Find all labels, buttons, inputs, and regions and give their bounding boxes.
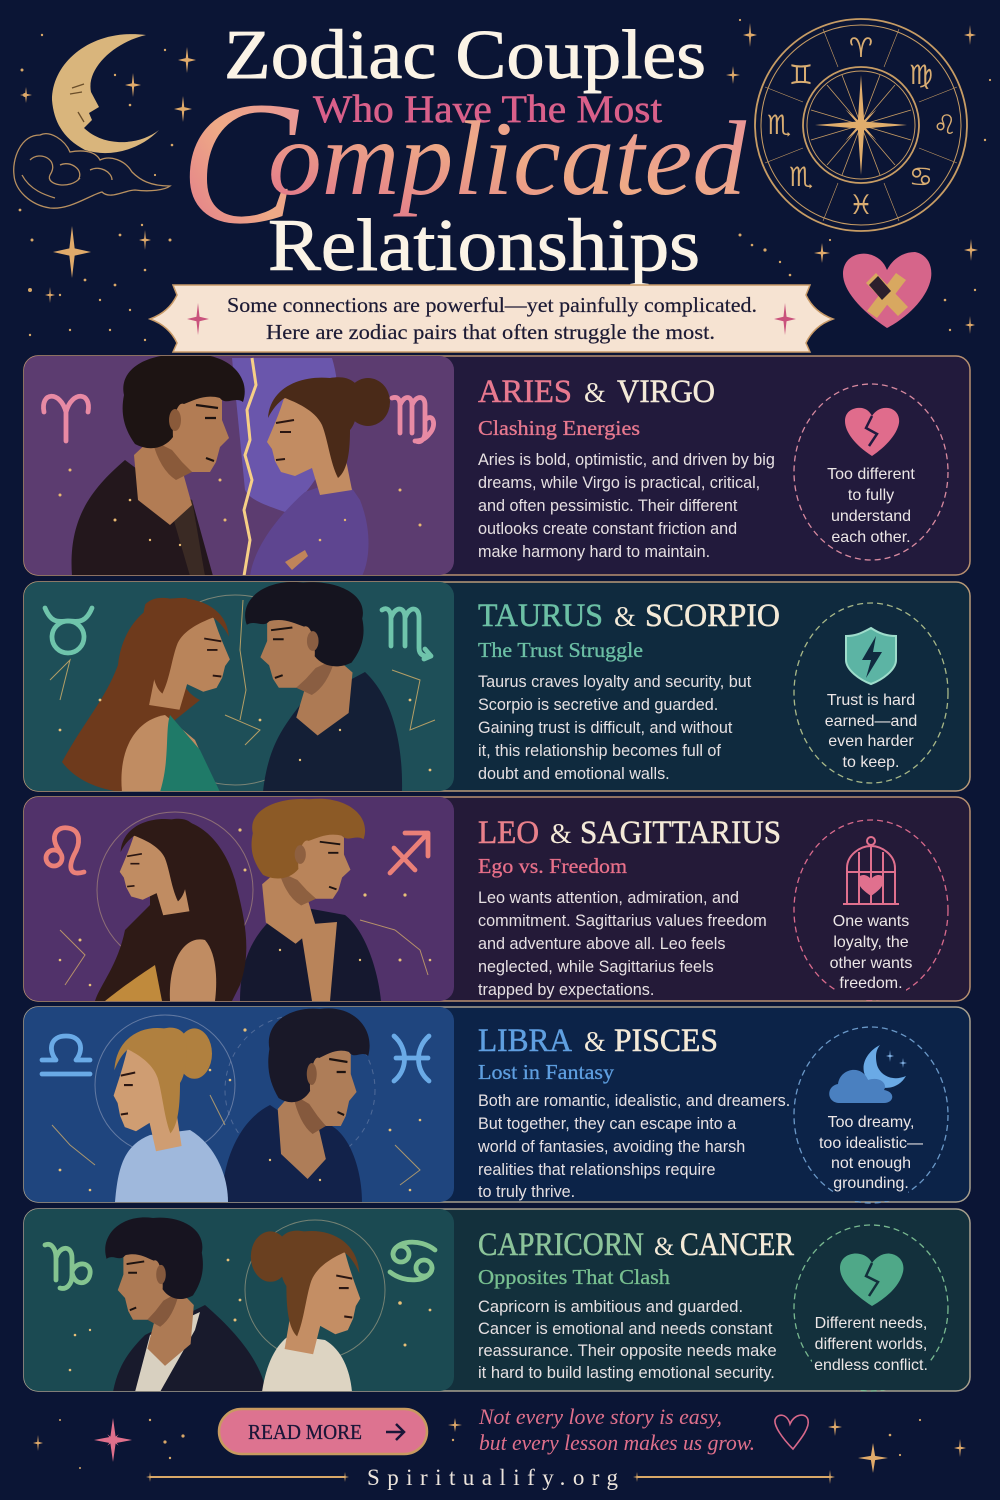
icon: Capricorn glyph (45, 1244, 90, 1288)
heading: Aries & Virgo: ARIES (478, 374, 572, 410)
icon: Pisces glyph (394, 1036, 429, 1081)
description: it, this relationship becomes full of (478, 742, 721, 760)
stars top right (726, 23, 978, 334)
icon: Libra glyph (42, 1036, 90, 1074)
description: outlooks create constant friction and (478, 520, 737, 538)
website: Spiritualify.org (367, 1465, 618, 1490)
heading: Aries & Virgo: VIRGO (617, 374, 715, 410)
subtitle: Opposites That Clash (478, 1265, 671, 1289)
callout text: different worlds, (815, 1336, 927, 1353)
heading: Leo & Sagittarius: & (550, 819, 572, 850)
callout text: each other. (831, 529, 911, 546)
callout text: to fully (848, 487, 894, 504)
description: reassurance. Their opposite needs make (478, 1342, 777, 1360)
title script: Complicated: C (180, 66, 300, 261)
description: world of fantasies, avoiding the harsh (477, 1138, 745, 1156)
icon: broken heart (845, 408, 899, 456)
callout text: grounding. (833, 1175, 909, 1192)
title script: Complicated: omplicated (268, 100, 747, 217)
zodiac wheel: ♏︎ (789, 162, 813, 193)
illustration: Aries and Virgo couple (24, 354, 454, 576)
callout text: other wants (830, 955, 912, 972)
heading: Capricorn & Cancer: & (654, 1232, 674, 1261)
description: make harmony hard to maintain. (478, 543, 710, 561)
heading: Libra & Pisces (478, 1023, 718, 1059)
description: Taurus craves loyalty and security, but (478, 673, 752, 691)
description: Capricorn is ambitious and guarded. (478, 1298, 743, 1316)
description: doubt and emotional walls. (478, 765, 670, 783)
illustration: Capricorn and Cancer couple (24, 1209, 454, 1392)
heading: Aries & Virgo: & (584, 378, 606, 409)
icon: Aries glyph (43, 396, 89, 441)
callout text: even harder (828, 733, 914, 750)
icon: Taurus glyph (45, 608, 92, 653)
icon: Virgo glyph (392, 397, 434, 442)
callout text: One wants (833, 913, 909, 930)
subtitle: The Trust Struggle (478, 638, 643, 662)
zodiac wheel: ♍︎ (909, 60, 933, 91)
callout: too dreamy (794, 1027, 948, 1203)
description (477, 1092, 790, 1201)
callout text (830, 913, 912, 992)
description: and often pessimistic. Their different (478, 497, 738, 515)
heading: Taurus & Scorpio: SCORPIO (645, 598, 780, 634)
heading: Libra & Pisces: & (584, 1027, 606, 1058)
callout text: Different needs, (815, 1315, 927, 1332)
icon: Scorpio glyph (382, 609, 431, 659)
icon: arrow (386, 1424, 404, 1440)
tagline (478, 1404, 755, 1455)
footer stars (33, 1418, 966, 1473)
heading: Libra & Pisces: LIBRA (478, 1023, 572, 1059)
heading: Leo & Sagittarius (478, 815, 781, 851)
subtitle: Ego vs. Freedom (478, 854, 627, 878)
callout: too different (794, 384, 948, 560)
subtitle: Clashing Energies (478, 416, 640, 440)
description: Gaining trust is difficult, and without (478, 719, 733, 737)
callout text (814, 1315, 928, 1374)
description: trapped by expectations. (478, 981, 654, 999)
subtitle: Lost in Fantasy (478, 1060, 615, 1084)
icon: moon and cloud (829, 1045, 907, 1103)
illustration: Libra and Pisces couple (24, 1007, 454, 1202)
illustration: Taurus and Scorpio couple (24, 582, 454, 792)
zodiac wheel: ♌︎ (933, 110, 957, 141)
title line: Relationships: Relationships (268, 205, 700, 287)
icon: Cancer glyph (390, 1242, 435, 1280)
callout text: freedom. (839, 975, 903, 992)
description: Both are romantic, idealistic, and dreamers. (478, 1092, 790, 1110)
panel: Libra & Pisces (24, 1007, 970, 1203)
heading: Capricorn & Cancer: CAPRICORN (478, 1227, 644, 1263)
callout text (827, 466, 915, 546)
callout text (825, 692, 917, 771)
title line: Zodiac Couples: Zodiac Couples (224, 17, 706, 94)
description: neglected, while Sagittarius feels (478, 958, 714, 976)
callout text: Too dreamy, (828, 1114, 914, 1131)
description: to truly thrive. (478, 1183, 575, 1201)
stars top left (20, 47, 196, 303)
zodiac wheel: ♈︎ (849, 33, 873, 64)
panel: Leo & Sagittarius (24, 797, 970, 1001)
description: Cancer is emotional and needs constant (478, 1320, 773, 1338)
heading: Leo & Sagittarius: SAGITTARIUS (580, 815, 781, 851)
description: realities that relationships require (478, 1161, 716, 1179)
heading: Capricorn & Cancer (478, 1227, 794, 1263)
heading: Taurus & Scorpio: TAURUS (478, 598, 603, 634)
icon: cracked shield (846, 628, 896, 684)
panel: Capricorn & Cancer (24, 1209, 970, 1392)
panel: Aries & Virgo (24, 354, 970, 576)
description (478, 673, 752, 783)
heading: Leo & Sagittarius: LEO (478, 815, 539, 851)
description: it hard to build lasting emotional security. (478, 1364, 775, 1382)
description: Leo wants attention, admiration, and (478, 889, 739, 907)
zodiac wheel: ♊︎ (789, 60, 813, 91)
icon: crescent moon (52, 34, 159, 153)
button: read more: READ MORE (248, 1420, 362, 1444)
description: Aries is bold, optimistic, and driven by big (478, 451, 775, 469)
description (478, 451, 775, 561)
zodiac wheel: ♋︎ (909, 162, 933, 193)
callout text: loyalty, the (833, 934, 909, 951)
title line: Who Have The Most: Who Have The Most (313, 88, 662, 131)
description: commitment. Sagittarius values freedom (478, 912, 767, 930)
icon: bandaged heart (843, 252, 931, 328)
icon: birdcage with heart (843, 837, 899, 904)
description: But together, they can escape into a (478, 1115, 736, 1133)
illustration: Leo and Sagittarius couple (24, 797, 454, 1001)
intro text (227, 293, 757, 344)
description (478, 889, 767, 999)
callout text: Trust is hard (827, 692, 915, 709)
description: Scorpio is secretive and guarded. (478, 696, 718, 714)
callout: different worlds (794, 1225, 948, 1391)
tagline: but every lesson makes us grow. (479, 1430, 755, 1455)
description: and adventure above all. Leo feels (478, 935, 726, 953)
callout text (819, 1114, 923, 1192)
callout text: endless conflict. (814, 1357, 928, 1374)
footer divider right (633, 1470, 835, 1484)
icon: Leo glyph (46, 828, 84, 873)
description: dreams, while Virgo is practical, critical, (478, 474, 760, 492)
heading: Taurus & Scorpio: & (614, 602, 636, 633)
icon: broken heart (840, 1254, 903, 1306)
icon: cloud outline (14, 134, 170, 208)
zodiac wheel: ♓︎ (849, 190, 873, 221)
intro banner (150, 285, 833, 352)
zodiac wheel: ♏︎ (767, 110, 791, 141)
title script: Complicated (180, 66, 747, 261)
callout text: not enough (831, 1155, 911, 1172)
callout text: to keep. (843, 754, 899, 771)
callout: loyalty vs freedom (794, 820, 948, 1000)
callout text: understand (831, 508, 911, 525)
heading: Capricorn & Cancer: CANCER (680, 1227, 794, 1263)
icon: heart outline (775, 1415, 808, 1449)
zodiac wheel (755, 19, 967, 231)
callout text: Too different (827, 466, 915, 483)
tagline: Not every love story is easy, (478, 1404, 722, 1429)
icon: Sagittarius glyph (390, 833, 428, 873)
callout text: too idealistic— (819, 1135, 923, 1152)
callout: trust (794, 603, 948, 783)
heading: Libra & Pisces: PISCES (614, 1023, 718, 1059)
heading: Taurus & Scorpio (478, 598, 780, 634)
intro text: Some connections are powerful—yet painfully complicated. (227, 293, 757, 317)
button: read more (219, 1409, 427, 1454)
callout text: earned—and (825, 713, 917, 730)
intro text: Here are zodiac pairs that often struggle the most. (266, 320, 715, 344)
footer divider left (146, 1472, 349, 1482)
title (180, 17, 747, 287)
panel: Taurus & Scorpio (24, 582, 970, 792)
description (478, 1298, 777, 1382)
heading: Aries & Virgo (478, 374, 715, 410)
